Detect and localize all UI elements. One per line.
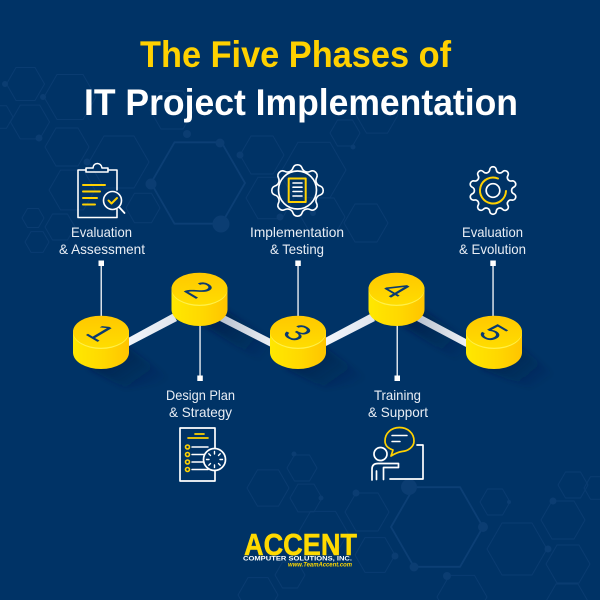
label: implementation and testing [250, 224, 344, 257]
connector: 1 to 2 [129, 314, 177, 346]
pin: phase 1 [98, 260, 104, 317]
disc: phase 5: 5 [471, 319, 516, 346]
disc: phase 1 [73, 316, 129, 369]
disc: phase 4 [368, 273, 424, 326]
disc shadows [88, 308, 555, 388]
logo: COMPUTER SOLUTIONS, INC. [243, 556, 352, 562]
label: training and support [368, 387, 428, 420]
disc: phase 1: 1 [78, 319, 123, 346]
icon: trainer with speech bubble [372, 428, 423, 480]
pin: phase 2 [197, 325, 203, 381]
title [84, 34, 518, 123]
connector: 4 to 5 [417, 315, 467, 348]
icon: clipboard with magnifier [78, 164, 124, 218]
disc: phase 3: 3 [275, 319, 320, 346]
label: evaluation and evolution: Evaluation [462, 224, 523, 240]
icon: toothed gear [466, 164, 520, 217]
label: evaluation and assessment: & Assessment [59, 241, 145, 257]
pin: phase 5 [490, 260, 496, 317]
connector: 2 to 3 [220, 315, 272, 348]
icon: checklist with clock [180, 428, 226, 481]
logo: www.TeamAccent.com [288, 562, 352, 568]
disc: phase 5 [466, 316, 522, 369]
background hexagon nodes [2, 81, 556, 580]
pin: phase 4 [394, 325, 400, 381]
label: training and support: & Support [368, 404, 428, 420]
background large hexagons [151, 142, 483, 567]
pin: phase 3 [295, 260, 301, 317]
label: evaluation and evolution: & Evolution [459, 241, 526, 257]
title: The Five Phases of [140, 34, 452, 75]
label: design plan and strategy: Design Plan [166, 387, 235, 403]
label: implementation and testing: & Testing [270, 241, 324, 257]
label: design plan and strategy: & Strategy [169, 404, 232, 420]
logo: ACCENT [244, 527, 357, 562]
label: training and support: Training [374, 387, 421, 403]
connector: 3 to 4 [326, 314, 375, 346]
disc: phase 2 [172, 273, 228, 326]
label: evaluation and assessment [59, 224, 145, 257]
disc: phase 3 [270, 316, 326, 369]
disc: phase 2: 2 [176, 276, 222, 303]
title: IT Project Implementation [84, 82, 518, 123]
label: design plan and strategy [166, 387, 235, 420]
label: evaluation and evolution [459, 224, 526, 257]
icon: gear with document [268, 161, 327, 220]
label: evaluation and assessment: Evaluation [71, 224, 132, 240]
disc: phase 4: 4 [373, 276, 419, 303]
label: implementation and testing: Implementation [250, 224, 344, 240]
